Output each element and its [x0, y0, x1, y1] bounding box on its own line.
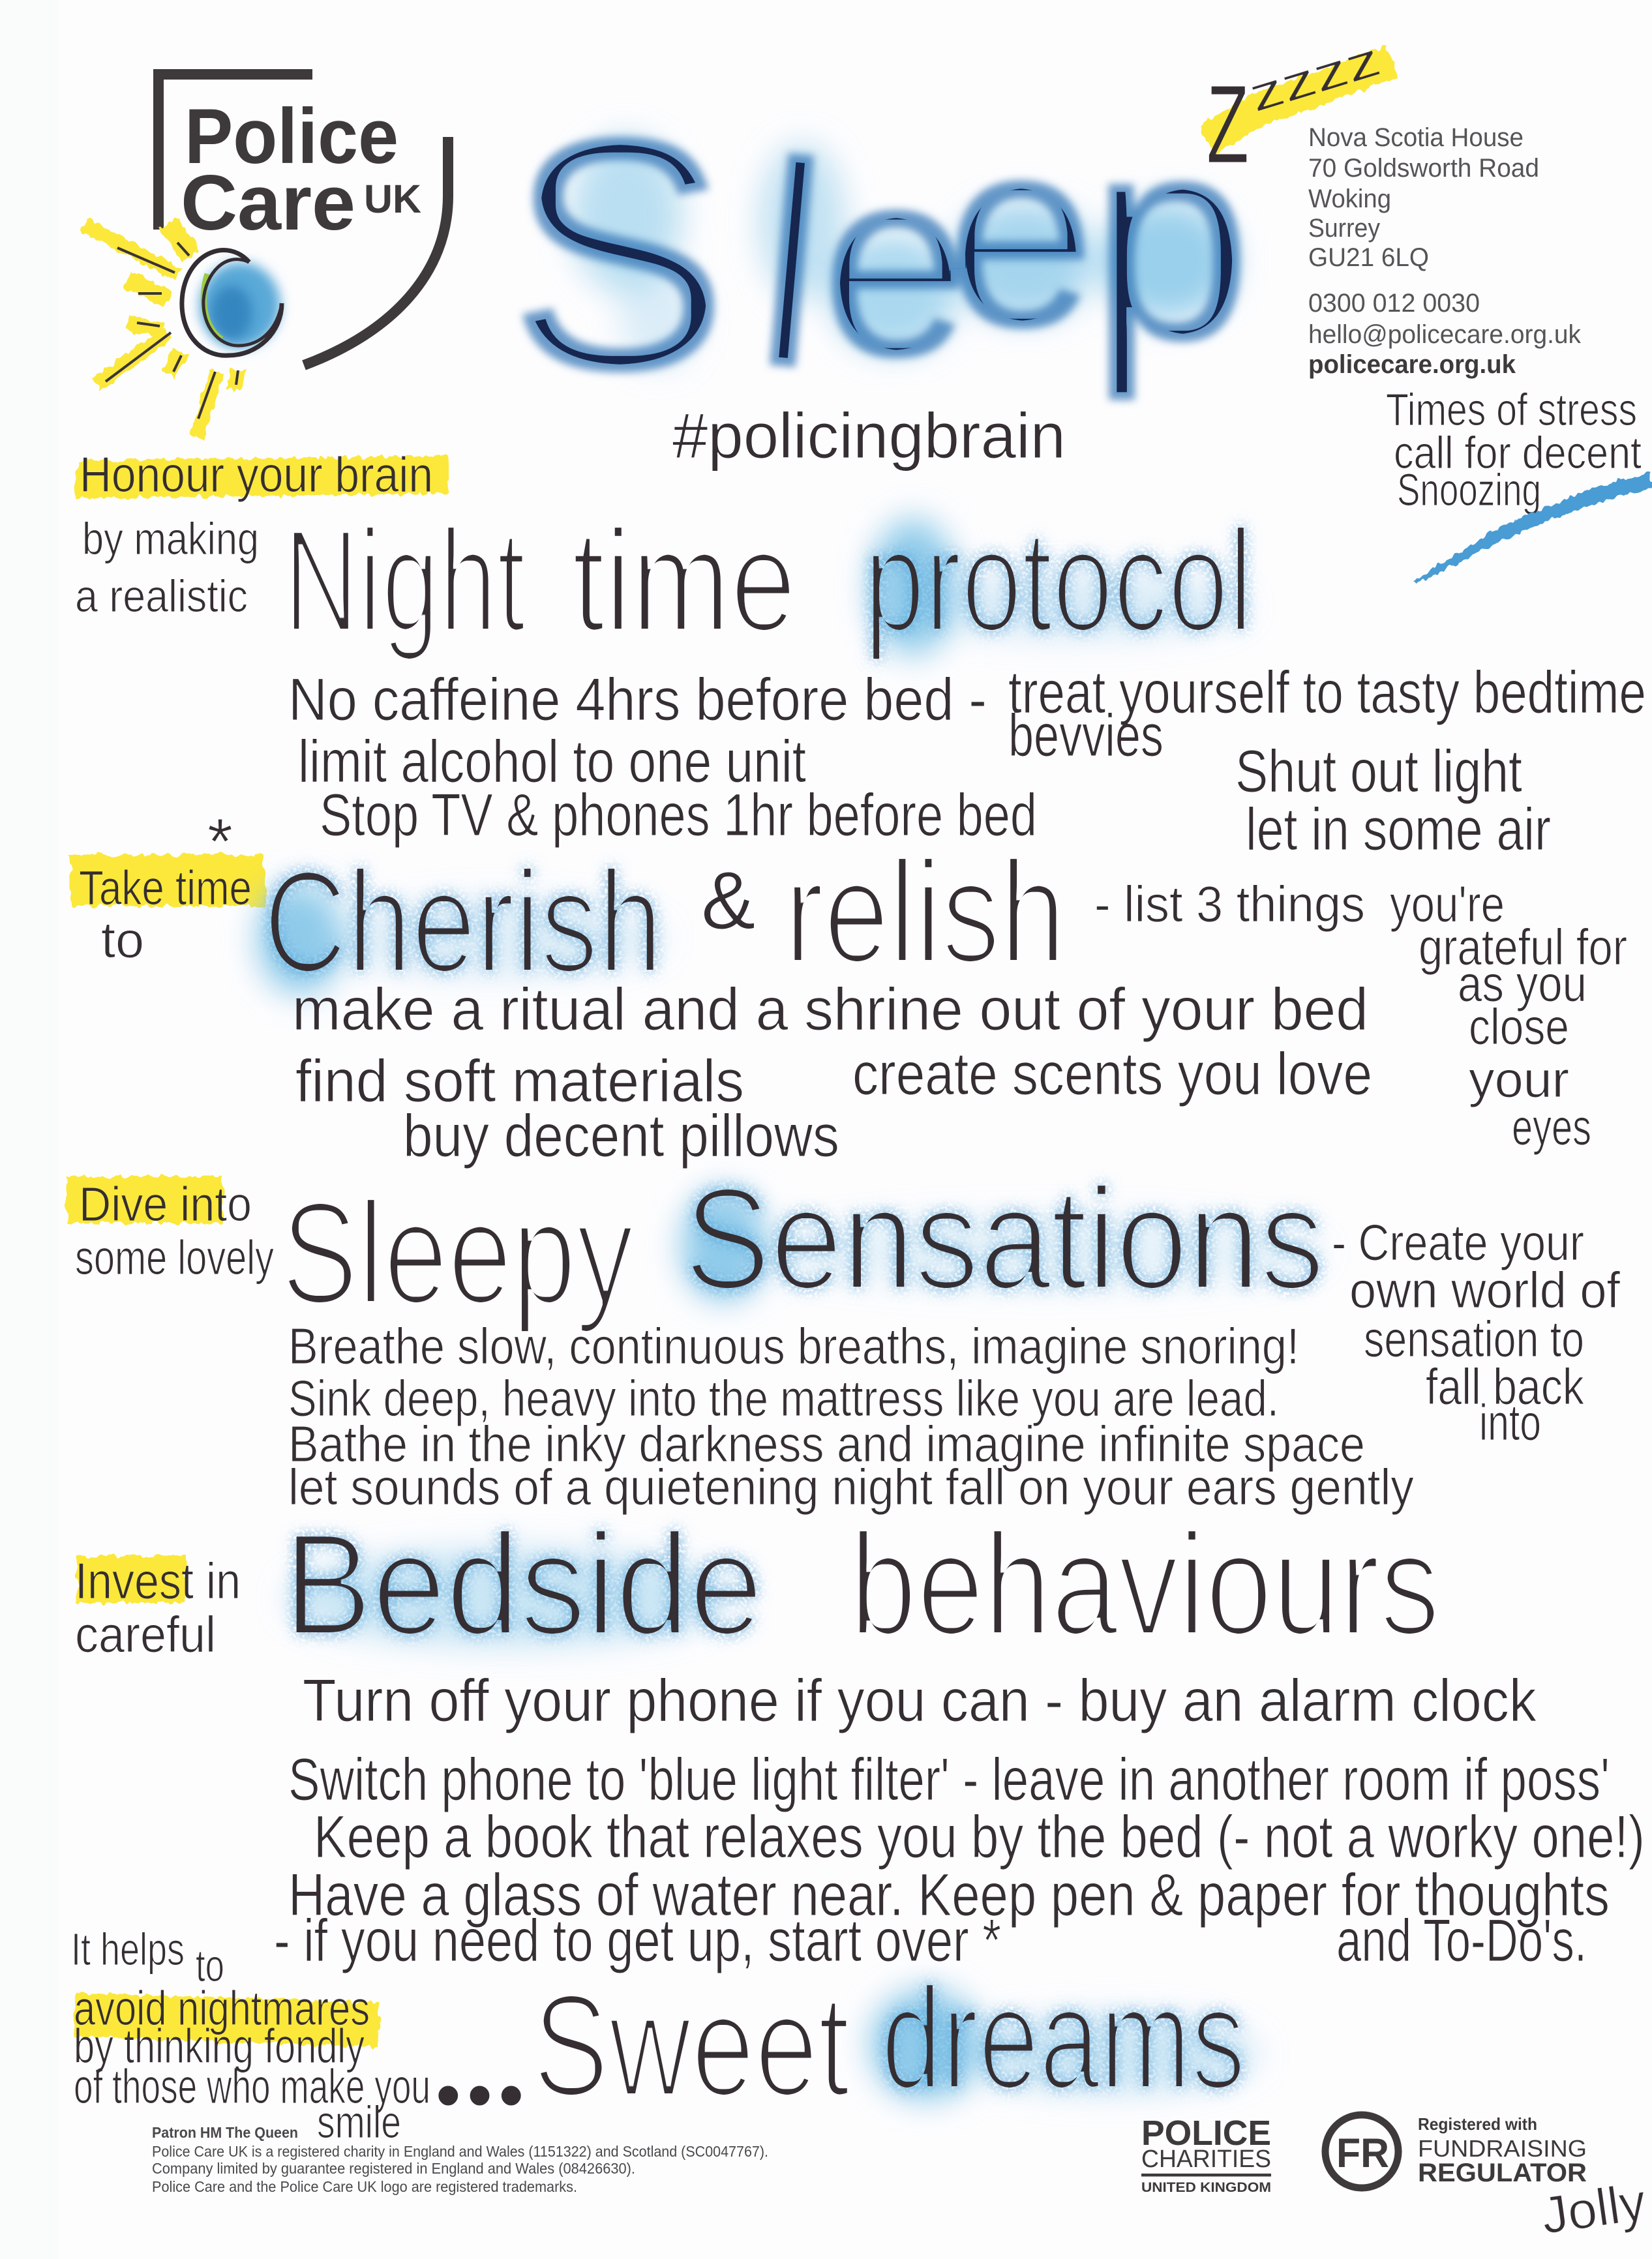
side note: dive into: Dive into [79, 1177, 252, 1231]
hashtag: #policingbrain [672, 400, 1066, 471]
sensations list: Breathe slow, continuous breaths, imagine snoring! [288, 1317, 1299, 1375]
headings without shading [281, 500, 1440, 2127]
sensations list [288, 1317, 1414, 1516]
cherish list: buy decent pillows [403, 1103, 839, 1169]
create your own world note: - Create your [1332, 1214, 1584, 1271]
heading: Night: Night [284, 500, 526, 662]
logo: Police Charities United Kingdom: CHARITIES [1141, 2146, 1271, 2173]
list 3 things note: eyes [1512, 1098, 1591, 1156]
cherish list: make a ritual and a shrine out of your bed [292, 976, 1368, 1043]
logo: Police Care UK: Police [185, 93, 398, 180]
bedside list [274, 1668, 1645, 1974]
footer legal text: Patron HM The Queen [152, 2124, 298, 2141]
side note: honour your brain: a realistic [75, 571, 248, 621]
night time list: No caffeine 4hrs before bed - [288, 666, 987, 733]
heading: protocol: protocol [864, 500, 1253, 662]
create your own world note: sensation to [1364, 1310, 1584, 1368]
logo: Police Charities United Kingdom: UNITED KINGDOM [1141, 2180, 1271, 2195]
sensations list: Bathe in the inky darkness and imagine infinite space [288, 1415, 1365, 1473]
night time list: limit alcohol to one unit [298, 728, 806, 795]
side note: avoid nightmares [71, 1924, 430, 2147]
cherish list [292, 976, 1372, 1169]
logo: Police Care UK: UK [364, 177, 421, 221]
list 3 things note: as you [1458, 955, 1587, 1012]
list 3 things note: close [1469, 998, 1569, 1055]
logo: Police Care UK: Care [181, 159, 355, 247]
footer legal text: Police Care UK is a registered charity in England and Wales (1151322) and Scotland (SC0047767). [152, 2143, 768, 2160]
logo: Police Care UK [158, 74, 448, 365]
create your own world note: own world of [1349, 1261, 1620, 1319]
sensations list: let sounds of a quietening night fall on your ears gently [288, 1458, 1414, 1516]
zzz note [1207, 33, 1387, 187]
logo: Fundraising Regulator: REGULATOR [1418, 2159, 1587, 2187]
logo: Fundraising Regulator: FR [1336, 2131, 1389, 2176]
logo: Fundraising Regulator [1325, 2114, 1587, 2188]
icon: sun with crescent moon [85, 223, 282, 438]
address block: policecare.org.uk [1308, 350, 1516, 379]
title: Sleep: e [946, 81, 1096, 383]
side note: invest in careful: careful [75, 1606, 216, 1663]
blue crayon stroke [1414, 473, 1652, 585]
side note: honour your brain [75, 447, 433, 621]
yellow highlights [67, 62, 1392, 2025]
side note: avoid nightmares: of those who make you [74, 2059, 430, 2114]
address block: GU21 6LQ [1308, 243, 1429, 272]
ampersand: & [701, 856, 755, 946]
night time list: Shut out light [1235, 738, 1522, 805]
blue crayon shading [258, 137, 1324, 2100]
signature: Jolly [1538, 2172, 1649, 2245]
note: times of stress: Snoozing [1397, 464, 1541, 515]
title: Sleep: p [1089, 74, 1252, 403]
footer legal text: Police Care and the Police Care UK logo are registered trademarks. [152, 2178, 577, 2195]
list 3 things note: - list 3 things [1094, 875, 1365, 933]
heading: Cherish: Cherish [263, 841, 663, 1003]
address block: hello@policecare.org.uk [1308, 320, 1582, 349]
headings with blue crayon shading [263, 500, 1325, 2119]
address block: Woking [1308, 185, 1391, 213]
bedside list: Turn off your phone if you can - buy an alarm clock [303, 1668, 1537, 1734]
night time list: bevvies [1008, 702, 1164, 769]
title: Sleep: e [820, 110, 971, 413]
footer legal text [152, 2124, 768, 2195]
list 3 things note: you're [1390, 875, 1505, 933]
heading: Sweet: Sweet [533, 1965, 850, 2127]
heading: dreams: dreams [881, 1958, 1246, 2119]
title: Sleep: S [507, 68, 729, 440]
side note: take time to: Take time [79, 861, 252, 915]
zzz note: zzzz [1243, 33, 1387, 122]
address block: Nova Scotia House [1308, 123, 1524, 152]
sensations list: Sink deep, heavy into the mattress like you are lead. [288, 1369, 1279, 1427]
zzz note: Z [1207, 63, 1249, 187]
cherish list: find soft materials [295, 1048, 744, 1115]
night time list: Stop TV & phones 1hr before bed [320, 782, 1037, 848]
heading: Sleepy: Sleepy [281, 1173, 634, 1334]
side note: avoid nightmares: to [196, 1940, 224, 1991]
cherish list: create scents you love [852, 1041, 1372, 1107]
create your own world note: into [1479, 1394, 1541, 1451]
side note: invest in careful: Invest in [75, 1552, 241, 1609]
side note: take time to: to [101, 911, 144, 968]
side note: invest in careful [75, 1552, 241, 1663]
heading: Bedside: Bedside [284, 1504, 763, 1666]
logo: Police Charities United Kingdom [1141, 2114, 1271, 2195]
list 3 things note [1094, 875, 1627, 1156]
side note: take time to [79, 861, 252, 968]
title: Sleep [507, 68, 1252, 440]
side note: avoid nightmares: It helps [71, 1924, 185, 1975]
address block: 0300 012 0030 [1308, 289, 1480, 318]
footer legal text: Company limited by guarantee registered in England and Wales (08426630). [152, 2160, 635, 2177]
side note: avoid nightmares: avoid nightmares [74, 1981, 370, 2035]
heading: time: time [572, 500, 796, 662]
side note: honour your brain: Honour your brain [80, 447, 433, 503]
side note: dive into [75, 1177, 274, 1285]
side note: avoid nightmares: smile [317, 2097, 401, 2147]
heading: behaviours: behaviours [850, 1504, 1440, 1666]
note: times of stress [1386, 384, 1642, 515]
ellipsis: ••• [436, 2055, 524, 2135]
logo: Fundraising Regulator: FUNDRAISING [1418, 2135, 1587, 2162]
heading: Sensations: Sensations [684, 1158, 1325, 1320]
side note: dive into: some lovely [75, 1231, 274, 1285]
logo: Police Charities United Kingdom: POLICE [1141, 2114, 1271, 2153]
bedside list: - if you need to get up, start over * [274, 1907, 1001, 1974]
asterisk: * [207, 805, 233, 878]
address block: 70 Goldsworth Road [1308, 154, 1539, 183]
night time list: let in some air [1246, 796, 1551, 863]
create your own world note [1332, 1214, 1620, 1451]
list 3 things note: your [1469, 1051, 1569, 1108]
night time list [288, 659, 1646, 863]
heading: relish: relish [785, 831, 1066, 993]
side note: avoid nightmares: by thinking fondly [74, 2019, 365, 2073]
address block: Surrey [1308, 214, 1380, 243]
side note: honour your brain: by making [82, 513, 259, 564]
title: Sleep: l [745, 100, 838, 431]
create your own world note: fall back [1426, 1358, 1585, 1415]
address block [1308, 123, 1582, 379]
logo: Fundraising Regulator: Registered with [1418, 2114, 1537, 2134]
